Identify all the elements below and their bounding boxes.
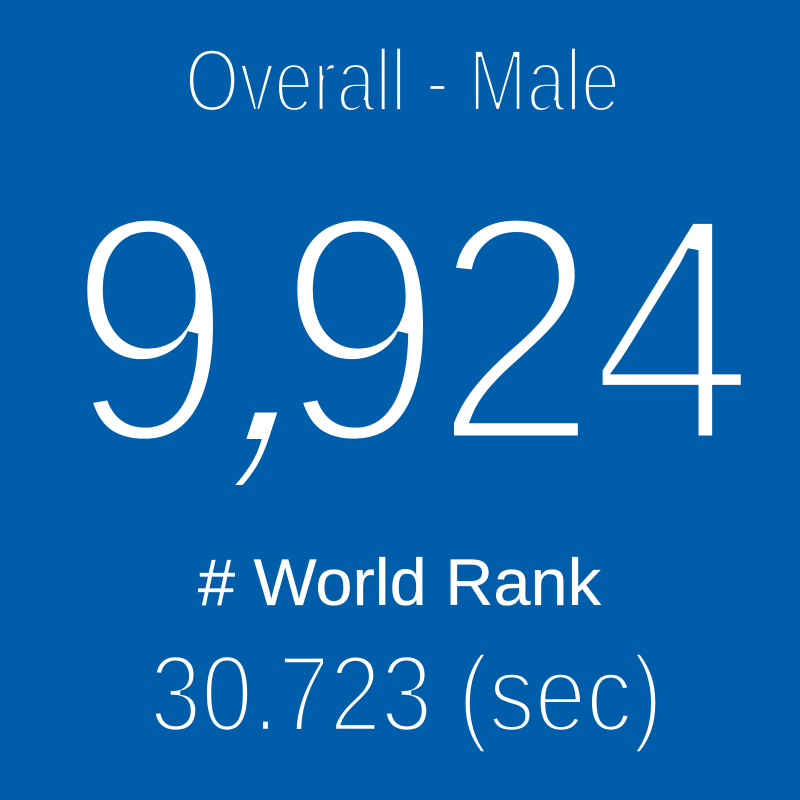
metric label: # World Rank: [198, 545, 602, 619]
main number: ,: [180, 120, 410, 522]
metric value: 30.723 (sec): [150, 633, 663, 755]
main number: 9924: [68, 148, 755, 511]
title: Overall - Male: [185, 30, 620, 130]
